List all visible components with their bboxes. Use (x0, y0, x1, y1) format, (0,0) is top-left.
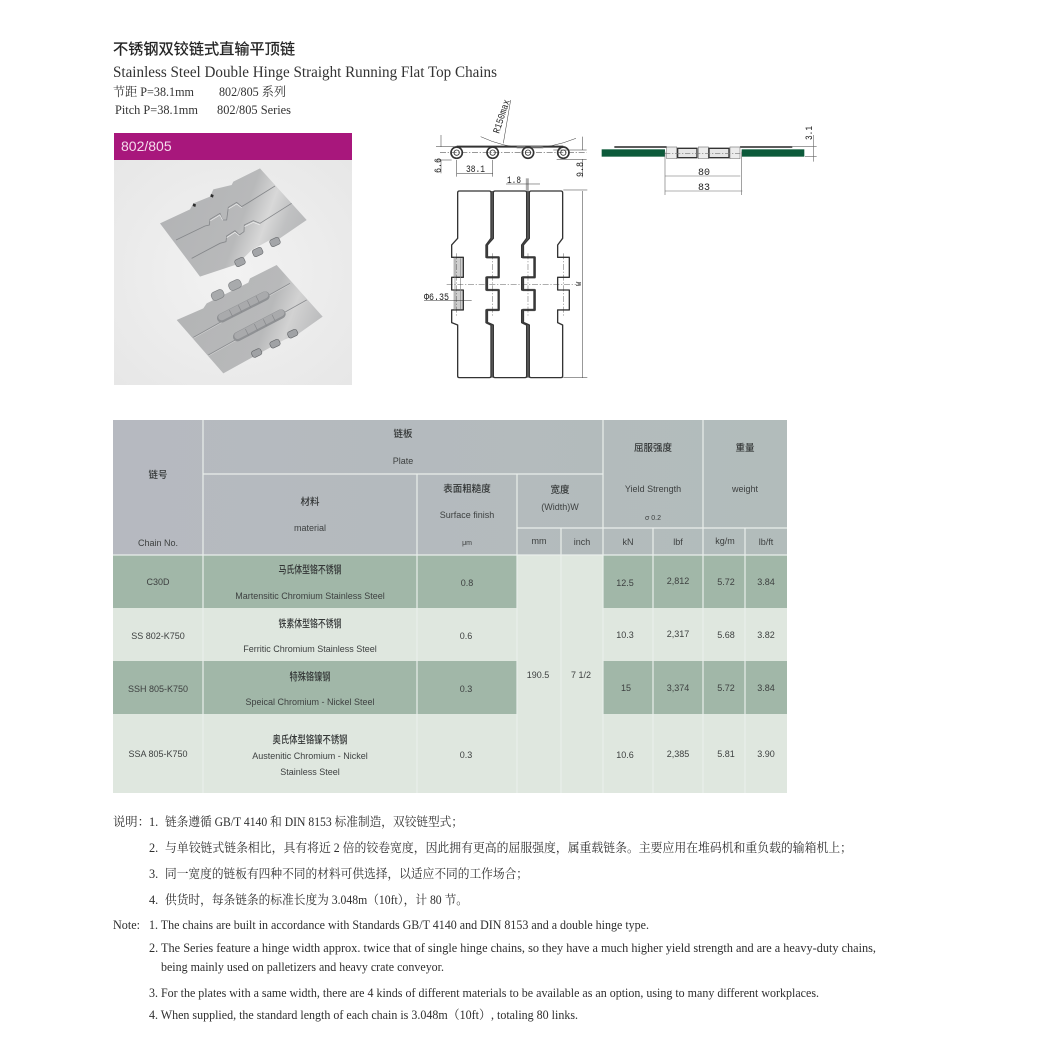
dimension labels: profile and plan view: R150max (492, 99, 514, 135)
header: plate (393, 426, 413, 466)
row: SS 802-K750: 铁素体型铬不锈钢 (278, 616, 342, 631)
row: SSH 805-K750 (128, 669, 775, 707)
notes: Chinese: 3. (149, 867, 158, 881)
header: yield strength: σ 0.2 (645, 515, 661, 522)
dimension labels: profile and plan view (424, 99, 587, 304)
row: SSH 805-K750: 0.3 (460, 684, 472, 694)
row: C30D: 5.72 (717, 577, 735, 587)
row: C30D: 马氏体型铬不锈钢 (278, 562, 342, 577)
dimension labels: profile and plan view: 9.8 (575, 162, 587, 177)
dimension labels: profile and plan view: W (576, 281, 584, 286)
row: SS 802-K750: 2,317 (667, 629, 689, 639)
header: chain no.: Chain No. (138, 538, 178, 548)
row: SSH 805-K750: 3.84 (757, 683, 775, 693)
notes: Chinese (113, 814, 852, 907)
header: weight: 重量 (735, 440, 755, 454)
row: SSH 805-K750: 15 (621, 683, 631, 693)
header: surface finish: 表面粗糙度 (443, 481, 491, 495)
dimension labels: cross-section (698, 126, 816, 194)
notes: Chinese: 同一宽度的链板有四种不同的材料可供选择，以适应不同的工作场合； (165, 866, 528, 881)
dimension labels: cross-section: 80 (698, 167, 710, 179)
merged width values: 7 1/2 (571, 670, 591, 680)
row: SS 802-K750: 0.6 (460, 631, 472, 641)
header: yield strength: 屈服强度 (634, 440, 672, 454)
notes: Chinese: 说明： (113, 815, 150, 829)
header: surface finish: μm (462, 540, 472, 547)
notes: Chinese: 供货时，每条链条的标准长度为 3.048m（10ft），计 80 节。 (165, 892, 468, 907)
row: C30D (146, 562, 775, 601)
header: yield strength: lbf (673, 537, 683, 547)
photo: upper chain underside view (160, 168, 307, 277)
pitch line: English: Pitch P=38.1mm (115, 103, 198, 117)
header: yield strength (622, 440, 683, 547)
header: chain no. (138, 467, 178, 548)
purple header bar: 802/805 (121, 138, 172, 154)
header: width: inch (574, 537, 590, 547)
notes: Chinese: 与单铰链式链条相比，具有将近 2 倍的铰卷宽度，因此拥有更高的屈服强度，属重载链条。主要应用在堆码机和重负载的输箱机上； (165, 840, 852, 855)
row: SSA 805-K750: 3.90 (757, 749, 775, 759)
header: chain no.: 链号 (148, 467, 168, 481)
row: SSH 805-K750: Speical Chromium - Nickel Steel (245, 697, 375, 707)
row: SSH 805-K750: 3,374 (667, 683, 689, 693)
header: plate: Plate (393, 456, 413, 466)
header: weight (715, 440, 774, 547)
row: SS 802-K750: 3.82 (757, 630, 775, 640)
table body rows (113, 555, 787, 793)
header: surface finish: Surface finish (440, 510, 494, 520)
dimension labels: profile and plan view: 38.1 (466, 164, 485, 176)
row: SSH 805-K750: 特殊铬镍钢 (290, 669, 330, 684)
row: SSA 805-K750: 2,385 (667, 749, 689, 759)
header: weight: lb/ft (759, 537, 774, 547)
series line: Chinese: 802/805 系列 (219, 84, 286, 99)
notes: Chinese: 1. (149, 815, 158, 829)
title block (113, 38, 497, 117)
panel: product photo (114, 133, 352, 385)
header: width: 宽度 (550, 482, 570, 496)
title: English: Stainless Steel Double Hinge Straight Running Flat Top Chains (113, 64, 497, 81)
row: SS 802-K750: 5.68 (717, 630, 735, 640)
notes: Chinese: 4. (149, 893, 158, 907)
row: SSA 805-K750: 奥氏体型铬镍不锈钢 (272, 732, 348, 747)
row: SSA 805-K750: Stainless Steel (280, 767, 340, 777)
row: SSH 805-K750: SSH 805-K750 (128, 684, 188, 694)
side profile with pins (436, 100, 587, 177)
row: C30D: 3.84 (757, 577, 775, 587)
pitch line: Chinese: 节距 P=38.1mm (113, 84, 194, 99)
header: yield strength: kN (622, 537, 634, 547)
specification table (113, 420, 787, 793)
header: width: (Width)W (541, 502, 579, 512)
row: C30D: 2,812 (667, 576, 689, 586)
row: SSA 805-K750 (128, 732, 775, 777)
notes: English: being mainly used on palletizers and heavy crate conveyor. (161, 960, 444, 974)
notes: English: Note: (113, 918, 140, 932)
row: SS 802-K750: SS 802-K750 (131, 631, 185, 641)
purple header bar (114, 133, 352, 160)
row: C30D: Martensitic Chromium Stainless Steel (235, 591, 385, 601)
header: weight: kg/m (715, 536, 735, 546)
header: surface finish (440, 481, 494, 547)
header: yield strength: Yield Strength (625, 484, 681, 494)
header: width (532, 482, 590, 547)
row: C30D: 0.8 (461, 578, 473, 588)
dimension labels: profile and plan view: Φ6.35 (424, 292, 449, 304)
row: C30D: C30D (146, 577, 170, 587)
notes: English (113, 918, 876, 1022)
series line: English: 802/805 Series (217, 103, 291, 117)
header: material: 材料 (300, 494, 320, 508)
notes: English: 1. The chains are built in accordance with Standards GB/T 4140 and DIN 8153 and a double hinge type. (149, 918, 649, 932)
dimension labels: cross-section: 3.1 (805, 126, 816, 140)
header: material: material (294, 523, 326, 533)
row: SSA 805-K750: 10.6 (616, 750, 634, 760)
row: SS 802-K750 (131, 616, 775, 654)
row: C30D: 12.5 (616, 578, 634, 588)
table header background (113, 420, 787, 555)
dimension labels: cross-section: 83 (698, 182, 710, 194)
row: SS 802-K750: 10.3 (616, 630, 634, 640)
title: Chinese: 不锈钢双铰链式直输平顶链 (113, 38, 295, 59)
merged width values: 190.5 (527, 670, 549, 680)
diagram: cross-section view (602, 135, 817, 195)
notes: Chinese: 2. (149, 841, 158, 855)
row: SSA 805-K750: 5.81 (717, 749, 735, 759)
row: SS 802-K750: Ferritic Chromium Stainless Steel (243, 644, 377, 654)
header: material (294, 494, 326, 533)
header: plate: 链板 (393, 426, 413, 440)
row: SSA 805-K750: Austenitic Chromium - Nickel (252, 751, 368, 761)
dimension labels: profile and plan view: 1.8 (507, 175, 521, 187)
plan view outline (424, 178, 587, 378)
notes: English: 4. When supplied, the standard length of each chain is 3.048m（10ft）, totaling 80 links. (149, 1008, 578, 1022)
merged width values (527, 670, 591, 680)
row: SSA 805-K750: 0.3 (460, 750, 472, 760)
row: SSH 805-K750: 5.72 (717, 683, 735, 693)
notes: English: 3. For the plates with a same width, there are 4 kinds of different materials to be available as an option, using to many different workplaces. (149, 986, 819, 1000)
notes: Chinese: 链条遵循 GB/T 4140 和 DIN 8153 标准制造，双铰链型式； (165, 814, 463, 829)
photo: lower chain top view (177, 265, 323, 373)
notes: English: 2. The Series feature a hinge width approx. twice that of single hinge chains, so they have a much higher yield strength and are a heavy-duty chains, (149, 941, 876, 955)
dimension labels: profile and plan view: 6.6 (433, 158, 445, 173)
header: width: mm (532, 536, 546, 546)
header: weight: weight (731, 484, 759, 494)
diagram: chain side profile and plan view (424, 100, 587, 378)
row: SSA 805-K750: SSA 805-K750 (128, 749, 188, 759)
